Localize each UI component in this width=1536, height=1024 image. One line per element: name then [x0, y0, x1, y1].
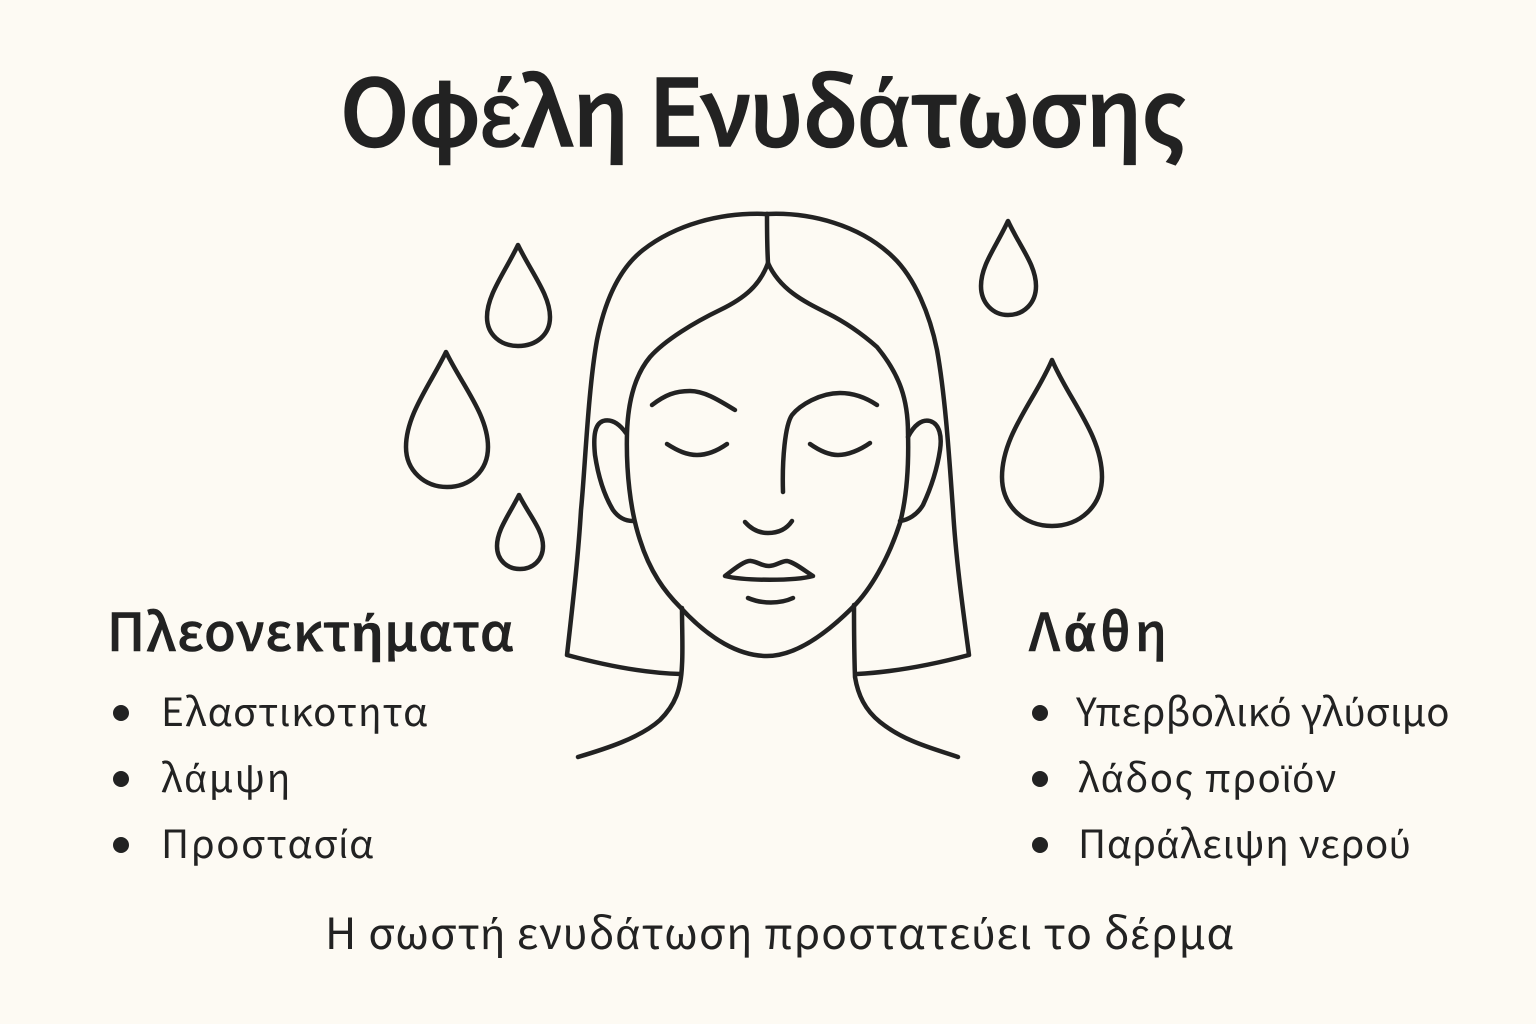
- list: advantages: [113, 682, 429, 870]
- icon: nose: [745, 393, 877, 533]
- icon: neck and shoulders: [578, 605, 958, 757]
- icon: eyebrows and eyes: [652, 391, 870, 455]
- bullet item: protection: Προστασία: [161, 814, 375, 870]
- bullet item: wrong product: λάδος προϊόν: [1078, 748, 1338, 804]
- heading: advantages: Πλεονεκτήματα: [107, 591, 514, 666]
- icon: lips: [725, 561, 813, 602]
- icon: ears: [594, 420, 941, 521]
- bullet item: over-sliding: Υπερβολικό γλύσιμο: [1076, 682, 1450, 738]
- icon: water drop top left: [487, 245, 550, 346]
- icon: water drop top right: [981, 221, 1036, 315]
- bullet item: skipping water: Παράλειψη νερού: [1078, 814, 1411, 870]
- icon: hair: [567, 214, 969, 674]
- footer caption: Η σωστή ενυδάτωση προστατεύει το δέρμα: [325, 900, 1235, 962]
- icon: face outline: [627, 263, 908, 656]
- icon: water drop mid left: [406, 352, 488, 487]
- bullet item: glow: λάμψη: [161, 748, 292, 804]
- icon: water drop large right: [1002, 360, 1102, 526]
- list: mistakes: [1032, 682, 1450, 870]
- bullet item: elasticity: Ελαστικοτητα: [161, 682, 429, 738]
- title: Οφέλη Ενυδάτωσης: [340, 40, 1186, 173]
- heading: mistakes: Λάθη: [1029, 591, 1171, 666]
- icon: water drop small left: [497, 495, 543, 569]
